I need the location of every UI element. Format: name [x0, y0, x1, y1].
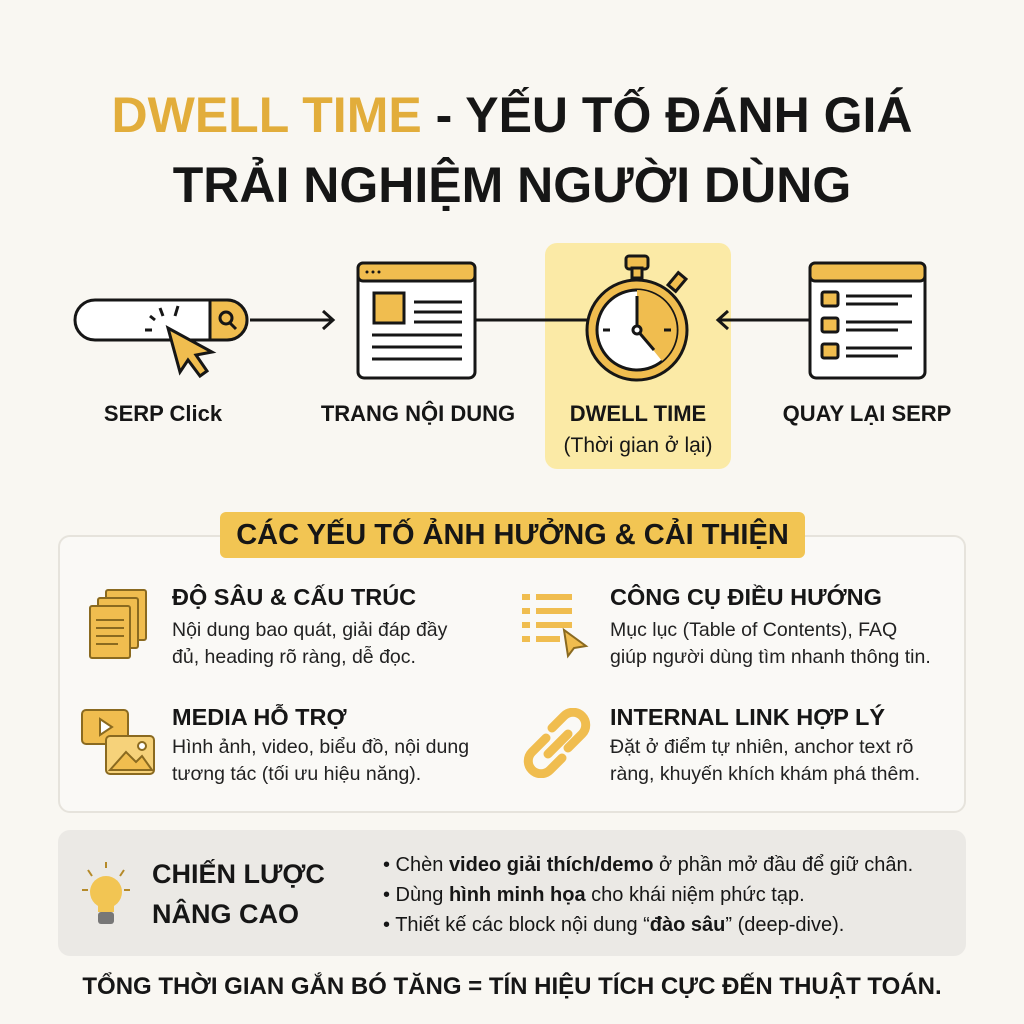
icon: SERP list [810, 263, 925, 378]
panel: factors [58, 535, 966, 813]
arrow 1 [250, 311, 333, 329]
icon: chain link [524, 708, 590, 778]
item: media ho tro: MEDIA HỖ TRỢ [172, 704, 347, 730]
factors heading: CÁC YẾU TỐ ẢNH HƯỞNG & CẢI THIỆN [236, 519, 789, 551]
text: Đặt ở điểm tự nhiên, anchor text rõ [610, 736, 913, 758]
title [112, 87, 912, 213]
text: Nội dung bao quát, giải đáp đầy [172, 619, 447, 641]
footer statement: TỔNG THỜI GIAN GẮN BÓ TĂNG = TÍN HIỆU TÍCH CỰC ĐẾN THUẬT TOÁN. [82, 973, 942, 1000]
text: Hình ảnh, video, biểu đồ, nội dung [172, 736, 469, 758]
label: dwell time [564, 401, 712, 457]
title: DWELL TIME - YẾU TỐ ĐÁNH GIÁ [112, 87, 912, 143]
flow diagram [74, 254, 926, 382]
item: do sau: ĐỘ SÂU & CẤU TRÚC [172, 584, 416, 610]
connector line [475, 318, 590, 322]
item: cong cu dieu huong: CÔNG CỤ ĐIỀU HƯỚNG [610, 584, 882, 610]
strategy bullets [383, 854, 913, 936]
icon: content page [358, 263, 475, 378]
icon: search bar with cursor [75, 300, 247, 376]
label: trang noi dung: TRANG NỘI DUNG [321, 401, 515, 426]
text: tương tác (tối ưu hiệu năng). [172, 763, 421, 785]
strategy bullets: • Thiết kế các block nội dung “đào sâu” (deep-dive). [383, 914, 844, 936]
text: Mục lục (Table of Contents), FAQ [610, 619, 897, 641]
label: quay lai serp: QUAY LẠI SERP [783, 401, 951, 426]
label: SERP Click: SERP Click [104, 401, 222, 426]
text: đủ, heading rõ ràng, dễ đọc. [172, 646, 416, 668]
strategy bullets: • Chèn video giải thích/demo ở phần mở đầu để giữ chân. [383, 854, 913, 876]
strategy heading: NÂNG CAO [152, 899, 299, 929]
title: TRẢI NGHIỆM NGƯỜI DÙNG [173, 157, 851, 213]
label: dwell time: (Thời gian ở lại) [564, 434, 712, 457]
arrow 2 [718, 311, 810, 329]
highlight panel: dwell time [545, 243, 731, 469]
text: ràng, khuyến khích khám phá thêm. [610, 763, 920, 785]
strategy bullets: • Dùng hình minh họa cho khái niệm phức tạp. [383, 884, 805, 906]
icon: documents [89, 589, 147, 659]
icon: stopwatch [587, 256, 687, 380]
strategy heading [152, 859, 325, 929]
panel: strategy [58, 830, 966, 956]
icon: media [81, 709, 155, 775]
icon: lightbulb [82, 862, 130, 924]
icon: list navigation [522, 594, 588, 658]
item: internal link: INTERNAL LINK HỢP LÝ [610, 704, 885, 730]
factors heading [220, 512, 805, 558]
text: giúp người dùng tìm nhanh thông tin. [610, 646, 931, 668]
label: dwell time: DWELL TIME [570, 401, 706, 426]
strategy heading: CHIẾN LƯỢC [152, 859, 325, 889]
